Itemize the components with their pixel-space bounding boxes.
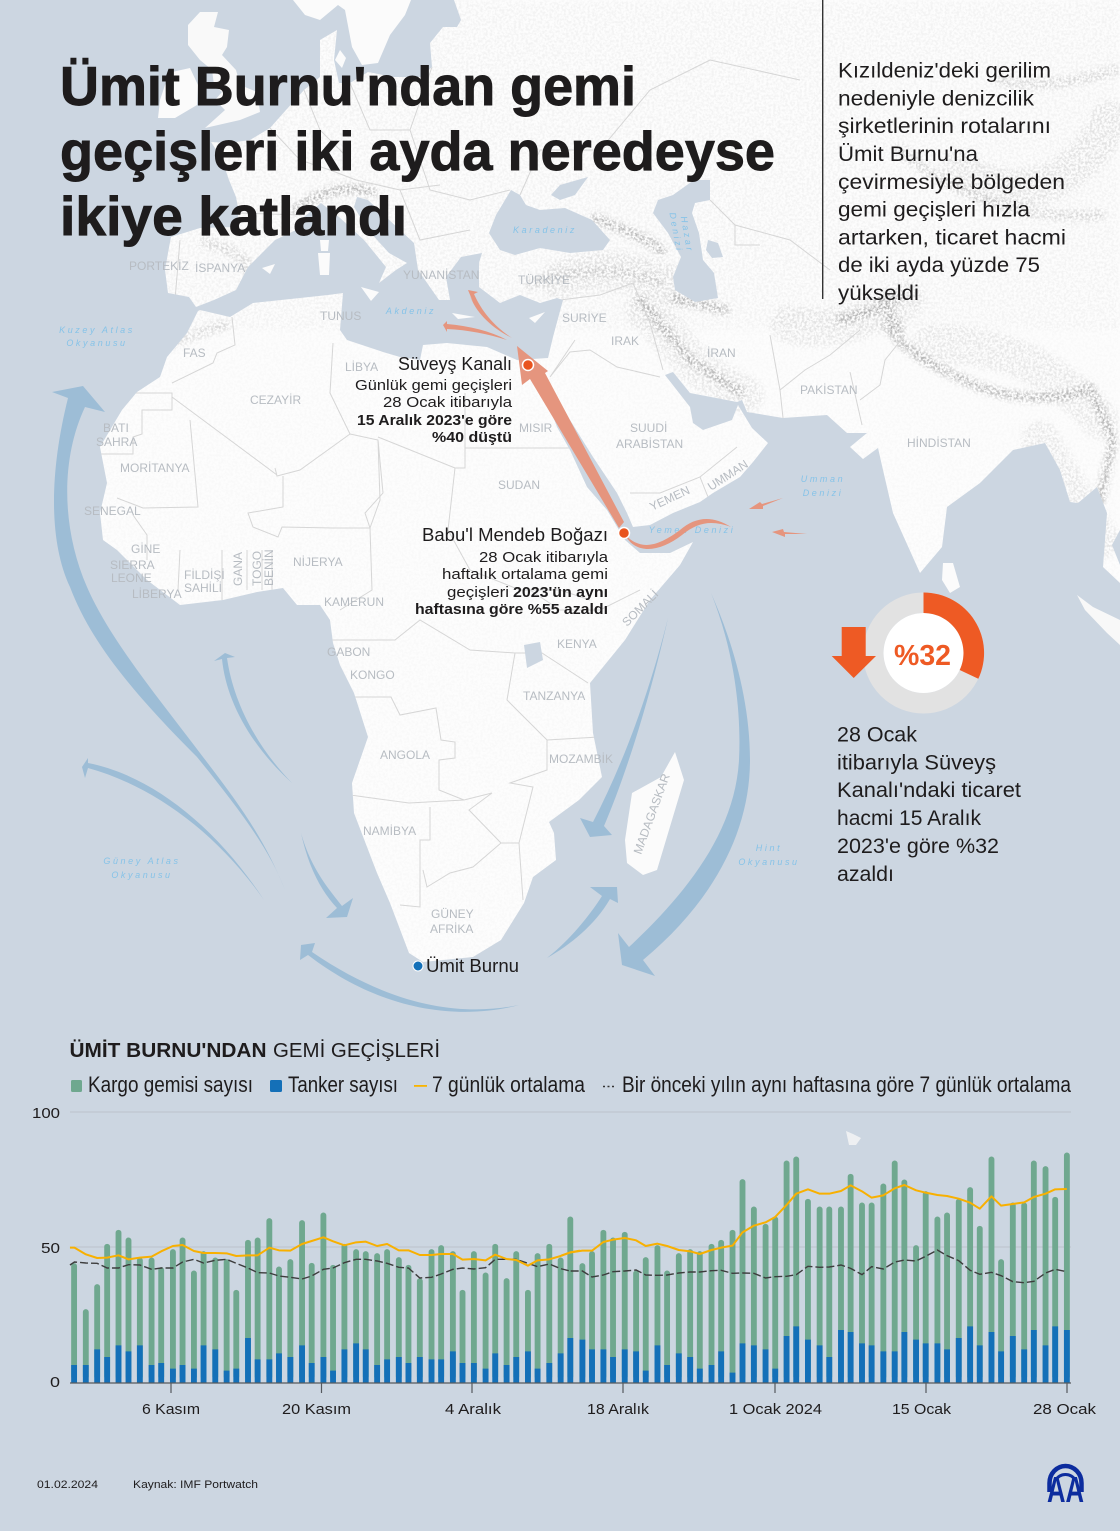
- country labels: UMMAN: [705, 457, 751, 494]
- orange line: 7-day average: [70, 1185, 1067, 1266]
- Sri Lanka: [942, 563, 960, 593]
- text: Süveyş trade volume: hacmi 15 Aralık: [837, 807, 981, 830]
- country labels: GANA: [231, 552, 245, 586]
- country labels: ANGOLA: [380, 748, 430, 762]
- country labels: İRAN: [707, 346, 736, 360]
- sea labels: Yemen Denizi: [649, 525, 735, 535]
- arrow: Arabian Sea upper: [749, 498, 783, 509]
- chart heading: ÜMİT BURNU'NDAN: [70, 1039, 266, 1062]
- divider line: [822, 0, 823, 299]
- country labels: FAS: [183, 346, 206, 360]
- x axis labels: 15 Ocak: [892, 1401, 952, 1418]
- sea labels: Karadeniz: [513, 225, 577, 235]
- logo: AA: [1047, 1466, 1084, 1510]
- country labels: BENİN: [262, 549, 276, 586]
- text: Süveyş trade volume: azaldı: [837, 863, 894, 886]
- country labels: BATI: [103, 421, 129, 435]
- country labels: SUDAN: [498, 478, 540, 492]
- Lake Victoria: [524, 642, 543, 668]
- callout: Babu'l Mendeb Boğazı: [415, 525, 609, 618]
- text: Süveyş trade volume: itibarıyla Süveyş: [837, 752, 996, 774]
- arrow: small route towards Gulf of Guinea: [214, 653, 292, 783]
- country labels: İSPANYA: [195, 261, 245, 275]
- x axis labels: 6 Kasım: [142, 1401, 200, 1418]
- sea labels: Güney Atlas: [103, 856, 181, 866]
- chart legend: [71, 1072, 1072, 1097]
- map speck in chart: [846, 1131, 861, 1145]
- country labels: SAHİLİ: [184, 581, 222, 595]
- grid lines: [70, 1112, 1071, 1247]
- chart heading: [70, 1039, 440, 1062]
- marker: Ümit Burnu: [413, 961, 423, 971]
- country labels: [84, 259, 971, 936]
- callout: Babu'l Mendeb Boğazı: 2023'ün aynı: [513, 584, 608, 601]
- dashed line: prior-year 7-day average: [70, 1250, 1067, 1283]
- country labels: SAHRA: [96, 435, 137, 449]
- callout: Babu'l Mendeb Boğazı: Babu'l Mendeb Boğazı: [422, 525, 608, 545]
- x axis labels: 1 Ocak 2024: [729, 1401, 822, 1418]
- donut chart: %32: %32: [894, 640, 951, 672]
- Scandinavia: [293, 0, 411, 65]
- country labels: NİJERYA: [293, 555, 343, 569]
- arrow: large west-coast route north: [52, 386, 285, 890]
- country labels: TÜRKİYE: [518, 273, 570, 287]
- title: [60, 55, 775, 247]
- sea labels: Hazar: [679, 215, 695, 254]
- Madagascar: [625, 752, 684, 875]
- intro text: Kızıldeniz'deki gerilim: [838, 60, 1051, 82]
- sea labels: Okyanusu: [111, 870, 173, 880]
- country labels: MISIR: [519, 421, 553, 435]
- country labels: SOMALİ: [619, 587, 661, 629]
- callout: Süveyş Kanalı: Günlük gemi geçişleri: [355, 377, 512, 394]
- callout: Babu'l Mendeb Boğazı: haftasına göre %55 azaldı: [415, 601, 608, 618]
- country labels: IRAK: [611, 334, 639, 348]
- country labels: MOZAMBİK: [549, 752, 613, 766]
- country labels: ARABİSTAN: [616, 437, 683, 451]
- callout: Babu'l Mendeb Boğazı: geçişleri: [447, 584, 509, 601]
- sea labels: Akdeniz: [385, 306, 436, 316]
- text: Süveyş trade volume: 28 Ocak: [837, 724, 917, 746]
- country labels: GABON: [327, 645, 370, 659]
- country labels: KENYA: [557, 637, 597, 651]
- country labels: TOGO: [250, 551, 264, 586]
- Sumatra: [1077, 595, 1120, 645]
- arrow: large Indian Ocean route south: [618, 593, 750, 976]
- country labels: NAMİBYA: [363, 824, 416, 838]
- footer date: 01.02.2024: [37, 1479, 98, 1491]
- arrow: route to the Cape from north: [301, 833, 353, 918]
- x axis labels: 20 Kasım: [282, 1401, 351, 1418]
- x axis labels: 4 Aralık: [445, 1401, 502, 1418]
- callout: Süveyş Kanalı: Süveyş Kanalı: [398, 354, 512, 374]
- text: Süveyş trade volume: [837, 724, 1021, 886]
- blue route arrows around the Cape: [52, 386, 750, 1012]
- country labels: SURİYE: [562, 311, 607, 325]
- callout: Süveyş Kanalı: %40 düştü: [432, 429, 512, 446]
- intro text: şirketlerinin rotalarını: [838, 115, 1051, 138]
- title: Ümit Burnu'ndan gemi: [60, 55, 636, 117]
- Black Sea: [489, 190, 610, 255]
- intro text: Ümit Burnu'na: [838, 143, 978, 166]
- country labels: SENEGAL: [84, 504, 141, 518]
- arrow: Red Sea route to Suez: [517, 346, 624, 528]
- Sea of Azov: [551, 177, 588, 200]
- label: Ümit Burnu: Ümit Burnu: [426, 956, 519, 976]
- callout: Babu'l Mendeb Boğazı: 28 Ocak itibarıyla: [479, 549, 609, 566]
- x axis labels: 18 Aralık: [587, 1401, 650, 1418]
- sea labels: Okyanusu: [738, 857, 800, 867]
- country labels: PORTEKİZ: [129, 259, 189, 273]
- country labels: GİNE: [131, 542, 160, 556]
- sea labels: [59, 212, 845, 880]
- title: geçişleri iki ayda neredeyse: [60, 120, 775, 182]
- sea labels: Umman: [801, 474, 845, 484]
- sea labels: Denizi: [803, 488, 843, 498]
- Aral Sea: [706, 240, 723, 258]
- country labels: GÜNEY: [431, 907, 474, 921]
- arrow: Mediterranean west: [443, 321, 507, 340]
- orange route arrows Red Sea: [443, 290, 807, 549]
- x axis with ticks: [70, 1383, 1071, 1393]
- map of Africa, Europe and Asia: [0, 0, 1120, 970]
- country labels: LEONE: [111, 571, 152, 585]
- intro text: [838, 60, 1066, 305]
- intro text: artarken, ticaret hacmi: [838, 226, 1066, 250]
- donut chart: %32: [873, 592, 984, 703]
- sea labels: Hint: [756, 843, 782, 853]
- callout: Süveyş Kanalı: 15 Aralık 2023'e göre: [357, 412, 512, 429]
- Caspian Sea: [653, 180, 718, 302]
- y axis labels: 50: [41, 1240, 60, 1257]
- text: Süveyş trade volume: Kanalı'ndaki ticaret: [837, 779, 1021, 802]
- y axis labels: 100: [32, 1105, 60, 1122]
- y axis labels: 0: [50, 1374, 60, 1391]
- country labels: AFRİKA: [430, 922, 473, 936]
- x axis labels: [142, 1401, 1097, 1418]
- footer source: Kaynak: IMF Portwatch: [133, 1479, 258, 1491]
- country labels: FİLDİŞİ: [184, 568, 225, 582]
- callout: Süveyş Kanalı: 28 Ocak itibarıyla: [383, 394, 513, 411]
- chart legend: Tanker sayısı: [288, 1072, 398, 1097]
- marker: Süveyş Kanalı: [522, 360, 534, 370]
- country labels: TANZANYA: [523, 689, 585, 703]
- country labels: LİBERYA: [132, 587, 182, 601]
- country labels: SIERRA: [110, 558, 155, 572]
- intro text: çevirmesiyle bölgeden: [838, 171, 1065, 194]
- country labels: CEZAYİR: [250, 393, 301, 407]
- intro text: nedeniyle denizcilik: [838, 88, 1035, 110]
- cargo bars, second half: [582, 1155, 1067, 1377]
- x axis labels: 28 Ocak: [1033, 1401, 1097, 1418]
- arrow: Mediterranean to Aegean: [468, 290, 512, 338]
- country labels: YEMEN: [647, 483, 692, 514]
- chart legend: 7 günlük ortalama: [432, 1072, 586, 1097]
- text: Süveyş trade volume: 2023'e göre %32: [837, 835, 999, 858]
- chart heading: GEMİ GEÇİŞLERİ: [273, 1039, 440, 1062]
- country labels: LİBYA: [345, 360, 378, 374]
- sea labels: Denizi: [668, 212, 684, 253]
- title: ikiye katlandı: [60, 185, 407, 247]
- sea labels: Kuzey Atlas: [59, 325, 135, 335]
- country labels: TUNUS: [320, 309, 361, 323]
- marker: Babu'l Mendeb: [618, 528, 630, 538]
- country labels: PAKİSTAN: [800, 383, 858, 397]
- bar chart: ship transits: [74, 1155, 1067, 1383]
- intro text: gemi geçişleri hızla: [838, 198, 1030, 222]
- arrow: Gulf of Aden curve: [624, 519, 731, 549]
- arrow: Arabian Sea lower: [772, 529, 807, 537]
- Gulf of Thailand: [1112, 530, 1120, 565]
- Mediterranean islands: [262, 50, 545, 323]
- country labels: HİNDİSTAN: [907, 436, 971, 450]
- country labels: KAMERUN: [324, 595, 384, 609]
- arrow: route back up Mozambique coast: [547, 887, 618, 958]
- country labels: YUNANİSTAN: [403, 268, 479, 282]
- sea labels: Okyanusu: [66, 338, 128, 348]
- arrow: route north-west Atlantic: [82, 758, 264, 900]
- Ireland: [158, 68, 198, 118]
- arrow: Mozambique Channel route south: [580, 618, 668, 837]
- y axis labels: [32, 1105, 60, 1391]
- intro text: yükseldi: [838, 282, 919, 305]
- country labels: MADAGASKAR: [631, 771, 673, 856]
- cargo bars, first half: [74, 1215, 570, 1377]
- country labels: KONGO: [350, 668, 395, 682]
- tanker bars, first half: [74, 1338, 570, 1383]
- chart legend: Kargo gemisi sayısı: [88, 1072, 253, 1097]
- intro text: de iki ayda yüzde 75: [838, 254, 1040, 277]
- callout: Süveyş Kanalı: [355, 354, 513, 446]
- tanker bars, second half: [582, 1326, 1067, 1383]
- country labels: SUUDİ: [630, 421, 667, 435]
- callout: Babu'l Mendeb Boğazı: haftalık ortalama gemi: [442, 566, 608, 583]
- Great Britain: [188, 12, 260, 128]
- logo: AA: AA: [1047, 1469, 1084, 1510]
- country labels: MORİTANYA: [120, 461, 190, 475]
- arrow: route around the Cape going west: [300, 943, 519, 1012]
- icon: down arrow: [832, 627, 876, 678]
